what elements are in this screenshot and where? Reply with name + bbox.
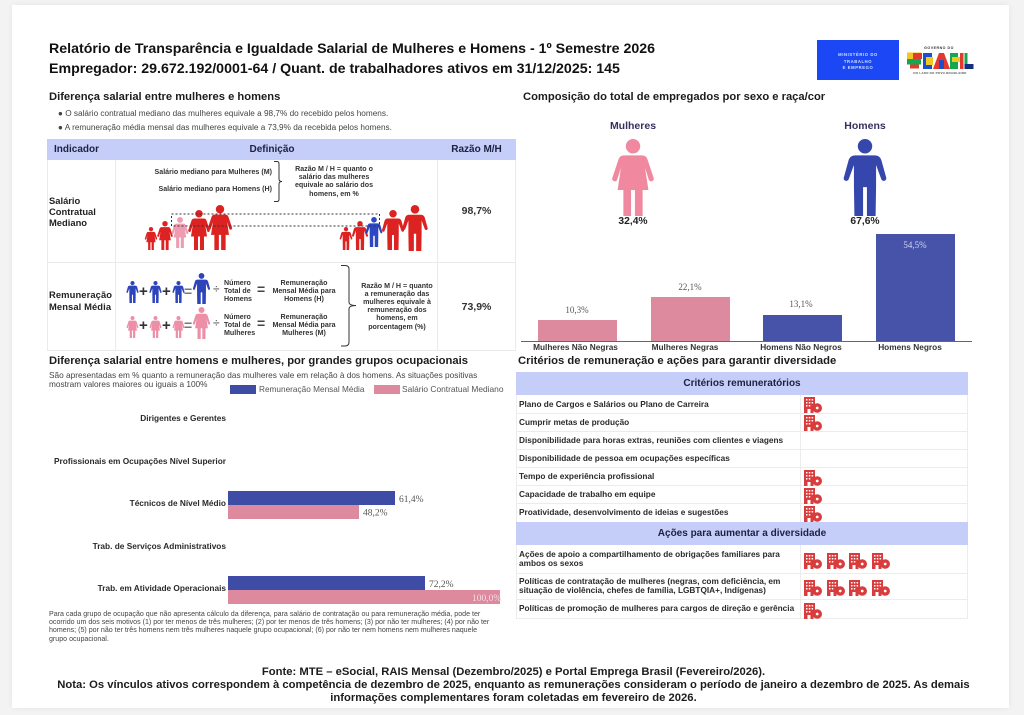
criteria row: Cumprir metas de produção: [519, 418, 629, 427]
bar chart: occupation: 100,0%: [472, 594, 501, 604]
bar chart: composição: 22,1%: [678, 282, 702, 292]
bar chart: occupation: 72,2%: [429, 580, 454, 590]
total women text: Total de: [224, 321, 251, 329]
logo: ministério: E EMPREGO: [843, 65, 873, 70]
mean salary women equation: +: [162, 317, 171, 334]
mean men text: [272, 279, 336, 303]
mean ratio text: remuneração dos: [367, 306, 427, 314]
total women text: Mulheres: [224, 329, 255, 337]
occupation label: Trab. de Serviços Administrativos: [93, 541, 226, 551]
mean salary men equation: [126, 273, 210, 304]
bullet text block: ● O salário contratual mediano das mulheres equivale a 98,7% do recebido pelos homens.: [58, 109, 388, 118]
chart description: São apresentadas em % quanto a remuneração das mulheres vale em relação à dos homens. As situações positivas: [49, 370, 477, 380]
header: indicador: Indicador: [54, 144, 99, 155]
bar chart: composição: 10,3%: [565, 305, 589, 315]
title: Relatório de Transparência e Igualdade Salarial de Mulheres e Homens - 1º Semestre 2026: [49, 40, 655, 56]
logo: ministério: MINISTÉRIO DO: [838, 52, 878, 57]
heading: diferença salarial: Diferença salarial entre mulheres e homens: [49, 91, 280, 103]
bullet text block: [58, 109, 392, 132]
median definition labels: [154, 168, 272, 193]
row label: salário: Mediano: [49, 216, 87, 228]
women figure group: [610, 120, 656, 226]
footnote: homens; (5) por não ter três homens nem três mulheres naquele grupo ocupacional; (6) por não ter nem homens nem mulheres naquele: [49, 626, 477, 634]
legend swatch blue: [230, 385, 256, 394]
row label: remuneração: Remuneração: [49, 289, 112, 300]
total men text: [224, 279, 252, 303]
equals men: =: [257, 281, 265, 297]
footnote: grupo ocupacional.: [49, 635, 109, 643]
legend swatch pink: [374, 385, 400, 394]
median ratio text: [295, 165, 373, 198]
mean men text: Remuneração: [281, 279, 327, 287]
total women text: Número: [224, 313, 251, 321]
panel: criteria table: [516, 372, 968, 619]
men figure group: [844, 120, 886, 226]
table header band: [47, 139, 516, 160]
logo: governo do brasil: GOVERNO DO: [924, 46, 954, 50]
title: [49, 40, 655, 76]
median brace: [274, 161, 282, 202]
footnote: [49, 610, 490, 643]
diversity header band: Ações para aumentar a diversidade: [658, 528, 826, 539]
median ratio text: Razão M / H = quanto o: [295, 165, 373, 173]
label: Mulheres: [610, 120, 656, 132]
mean salary women equation: =: [184, 317, 192, 333]
mean ratio text: a remuneração das: [365, 290, 429, 298]
mean ratio text: homens, em: [376, 314, 418, 322]
mean salary men equation: +: [139, 283, 148, 300]
action row: [519, 550, 780, 568]
action row: [519, 576, 780, 595]
header: definição: Definição: [249, 144, 294, 155]
action row: Políticas de promoção de mulheres para cargos de direção e gerência: [519, 604, 794, 613]
bar chart: composição: Homens Negros: [878, 342, 942, 352]
mean women text: Mulheres (M): [282, 329, 326, 337]
occupation label: Técnicos de Nível Médio: [130, 498, 226, 508]
row label: salário: [49, 194, 96, 228]
median ratio text: equivale ao salário dos: [295, 181, 373, 189]
action row: ambos os sexos: [519, 559, 583, 568]
median ratio text: salário das mulheres: [299, 173, 369, 181]
logo: ministério: TRABALHO: [844, 58, 872, 64]
row label: salário: Salário: [49, 194, 80, 206]
action row: Políticas de contratação de mulheres (negras, com deficiência, em: [519, 576, 780, 586]
mean women text: [272, 313, 336, 337]
row label: remuneração: [49, 289, 112, 312]
value 73,9: 73,9%: [462, 300, 491, 312]
total men text: Número: [224, 279, 251, 287]
action row: situação de violência, chefes de família, LGBTQIA+, Indígenas): [519, 586, 766, 595]
value: 32,4%: [618, 216, 648, 226]
median people illustration: [144, 205, 428, 251]
occupation label: Dirigentes e Gerentes: [140, 413, 226, 423]
value 98,7: 98,7%: [462, 205, 491, 217]
legend text blue: Remuneração Mensal Média: [259, 385, 364, 394]
table grid: [47, 160, 516, 351]
bar chart: occupation: 48,2%: [363, 508, 388, 518]
mean ratio text: Razão M / H = quanto: [361, 282, 433, 290]
criteria row: Plano de Cargos e Salários ou Plano de Carreira: [519, 400, 709, 409]
footer source and note: informações complementares foram coletadas em fevereiro de 2026.: [330, 692, 697, 704]
heading: composição: Composição do total de empregados por sexo e raça/cor: [523, 91, 825, 103]
legend text pink: Salário Contratual Mediano: [402, 384, 504, 394]
footer source and note: Nota: Os vínculos ativos correspondem à competência de dezembro de 2025, enquanto as remunerações consideram o período de janeiro a dezembro de 2025. As demais: [57, 679, 970, 691]
logo: governo do brasil: DO LADO DO POVO BRASILEIRO: [913, 71, 967, 75]
criteria row: Proatividade, desenvolvimento de ideias e sugestões: [519, 508, 728, 517]
mean ratio text: porcentagem (%): [368, 323, 426, 331]
icon: man: [844, 139, 886, 216]
criteria row: Disponibilidade para horas extras, reuniões com clientes e viagens: [519, 436, 783, 445]
mean salary men equation: +: [162, 283, 171, 300]
mean ratio text: mulheres equivale à: [363, 298, 431, 306]
mean men text: Homens (H): [284, 295, 324, 303]
total women text: [224, 313, 255, 337]
criteria header band: [516, 372, 968, 395]
footer source and note: [57, 666, 970, 704]
table grid: [516, 395, 968, 619]
row label: remuneração: Mensal Média: [49, 300, 111, 312]
company icons: [804, 397, 890, 619]
footnote: ocorrido um dos seis motivos (1) por ter menos de três mulheres; (2) por ter menos de três homens; (3) por não ter mulheres; (4) por não ter: [49, 618, 489, 626]
occupation label: Profissionais em Ocupações Nível Superior: [54, 456, 226, 466]
legend: [230, 384, 504, 394]
action row: Ações de apoio a compartilhamento de obrigações familiares para: [519, 550, 780, 558]
header: razão: Razão M/H: [451, 144, 502, 155]
icon: woman: [612, 139, 654, 216]
mean salary women equation: +: [139, 317, 148, 334]
label: Homens: [844, 120, 886, 132]
mean brace: [341, 265, 356, 346]
divide sign women: ÷: [213, 316, 220, 330]
mean women text: Remuneração: [281, 313, 327, 321]
mean women text: Mensal Média para: [272, 321, 336, 329]
median ratio text: homens, em %: [309, 190, 359, 198]
logo: governo do brasil: [907, 46, 974, 75]
bar chart: composição: 13,1%: [789, 299, 813, 309]
bar chart: composição: Mulheres Negras: [652, 342, 719, 352]
mean salary women equation: [126, 307, 210, 339]
value: 67,6%: [850, 216, 880, 226]
median definition labels: Salário mediano para Homens (H): [158, 185, 272, 193]
bar chart: composição: Mulheres Não Negras: [533, 342, 618, 352]
title: Empregador: 29.672.192/0001-64 / Quant. de trabalhadores ativos em 31/12/2025: 145: [49, 60, 620, 76]
bar chart: composição: 54,5%: [903, 240, 927, 250]
criteria header band: Critérios remuneratórios: [683, 378, 801, 389]
bullet text block: ● A remuneração média mensal das mulheres equivale a 73,9% da recebida pelos homens.: [58, 123, 392, 132]
criteria row: Tempo de experiência profissional: [519, 472, 654, 481]
panel: indicator table: [47, 139, 516, 351]
mean salary men equation: =: [184, 283, 192, 299]
bar chart: composição: Homens Não Negros: [760, 342, 842, 352]
chart description: mostram valores maiores ou iguais a 100%: [49, 380, 208, 389]
bar chart: occupation: [228, 491, 501, 604]
heading: critérios: Critérios de remuneração e ações para garantir diversidade: [518, 355, 836, 367]
total men text: Total de: [224, 287, 251, 295]
footnote: Para cada grupo de ocupação que não apresenta cálculo da diferença, para salário de contratação ou para remuneração média, pode ter: [49, 610, 480, 618]
bar chart: composição: [521, 234, 972, 352]
equals women: =: [257, 315, 265, 331]
logo: ministério: [817, 40, 899, 80]
bar chart: occupation: 61,4%: [399, 495, 424, 505]
occupation label: Trab. em Atividade Operacionais: [98, 583, 226, 593]
total men text: Homens: [224, 295, 252, 303]
divide sign men: ÷: [213, 282, 220, 296]
heading: diferença por grupos: Diferença salarial entre homens e mulheres, por grandes grupos ocupacionais: [49, 355, 468, 367]
diversity header band: [516, 522, 968, 545]
criteria row: Capacidade de trabalho em equipe: [519, 490, 655, 499]
footer source and note: Fonte: MTE – eSocial, RAIS Mensal (Dezembro/2025) e Portal Emprega Brasil (Fevereiro/2026).: [262, 666, 765, 678]
row label: salário: Contratual: [49, 206, 96, 216]
mean men text: Mensal Média para: [272, 287, 336, 295]
mean ratio text: [361, 282, 433, 331]
criteria row: Disponibilidade de pessoa em ocupações específicas: [519, 454, 730, 463]
chart description: [49, 370, 477, 389]
median definition labels: Salário mediano para Mulheres (M): [155, 168, 272, 176]
